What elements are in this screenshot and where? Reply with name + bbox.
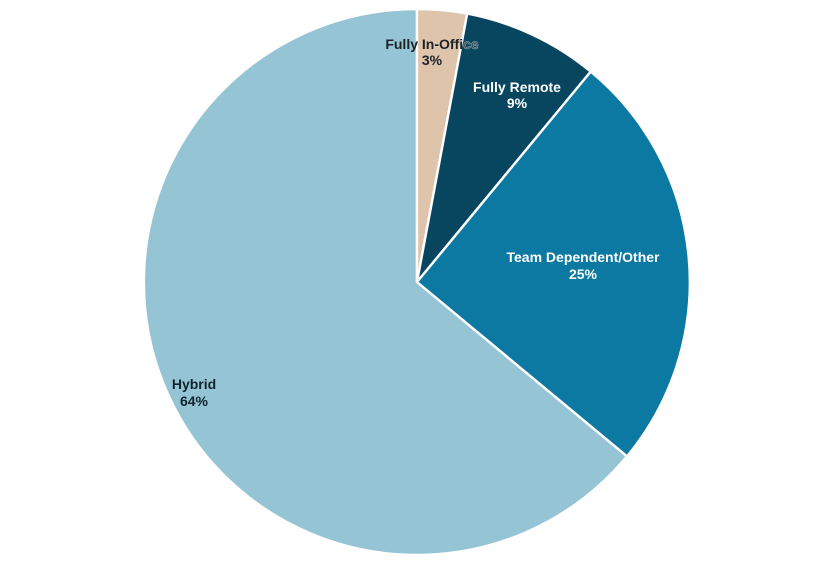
label: Hybrid 64%: Hybrid xyxy=(172,376,216,392)
label: Hybrid 64%: 64% xyxy=(180,393,209,409)
label: Hybrid 64% xyxy=(172,376,216,409)
label: Fully Remote 9%: 9% xyxy=(507,95,528,111)
label: Fully Remote 9% xyxy=(473,79,561,111)
slice: Fully Remote 9% xyxy=(417,14,591,282)
label: Team Dependent/Other 25%: 25% xyxy=(569,266,598,282)
label: Fully Remote 9%: Fully Remote xyxy=(473,79,561,95)
slice: Hybrid 64% xyxy=(144,9,627,555)
label: Team Dependent/Other 25% xyxy=(506,249,660,282)
slice: Team Dependent/Other 25% xyxy=(417,72,690,456)
slice: Fully In-Office 3% xyxy=(417,9,467,282)
label: Fully In-Office 3%: Fully In-Office xyxy=(385,36,479,52)
label: Fully In-Office 3%: 3% xyxy=(422,52,443,68)
label: Fully In-Office 3% xyxy=(385,36,479,68)
label: Team Dependent/Other 25%: Team Dependent/Other xyxy=(506,249,660,265)
